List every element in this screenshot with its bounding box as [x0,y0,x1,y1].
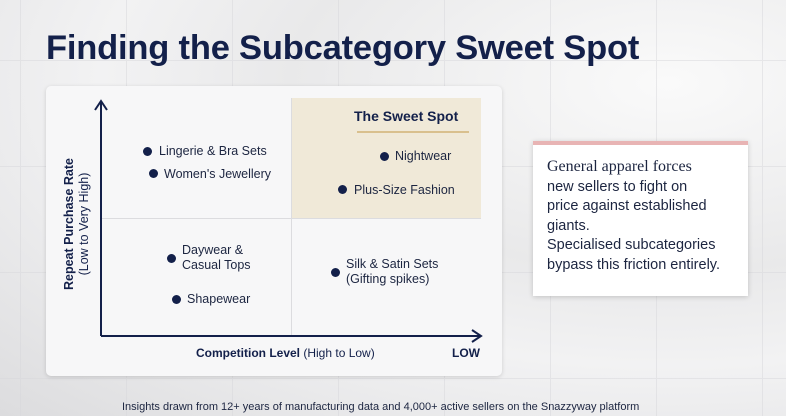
panel: matrix chart: Lingerie & Bra Sets [159,144,267,158]
sweet spot quadrant [291,98,481,218]
quadrant dividers [291,98,292,336]
x-axis label: Competition Level (High to Low) [196,346,375,360]
panel: matrix chart: Silk & Satin Sets [346,257,438,271]
callout: bypass this friction entirely. [547,256,720,272]
sweet spot heading: The Sweet Spot [354,108,458,124]
title: Finding the Subcategory Sweet Spot [46,29,639,67]
footer note: Insights drawn from 12+ years of manufacturing data and 4,000+ active sellers on the Snazzyway platform [122,401,639,413]
panel: matrix chart: Women's Jewellery [164,167,271,181]
panel: matrix chart: Daywear & [182,243,243,257]
y-axis label [62,158,91,290]
callout: new sellers to fight on [547,178,687,194]
panel: matrix chart [46,86,502,376]
panel: matrix chart: (Gifting spikes) [346,272,429,286]
callout: General apparel forces [547,158,692,175]
panel: matrix chart: Shapewear [187,292,250,306]
data points [143,147,152,156]
axes [94,99,483,343]
callout: Specialised subcategories [547,237,715,253]
panel: matrix chart: Nightwear [395,149,451,163]
panel: matrix chart: LOW [452,346,480,360]
callout: giants. [547,218,590,234]
y-axis label: Repeat Purchase Rate [62,158,76,290]
panel: matrix chart: Casual Tops [182,258,251,272]
callout: price against established [547,198,707,214]
y-axis label: (Low to Very High) [77,173,91,275]
callout [533,141,748,296]
panel: matrix chart: Plus-Size Fashion [354,183,455,197]
